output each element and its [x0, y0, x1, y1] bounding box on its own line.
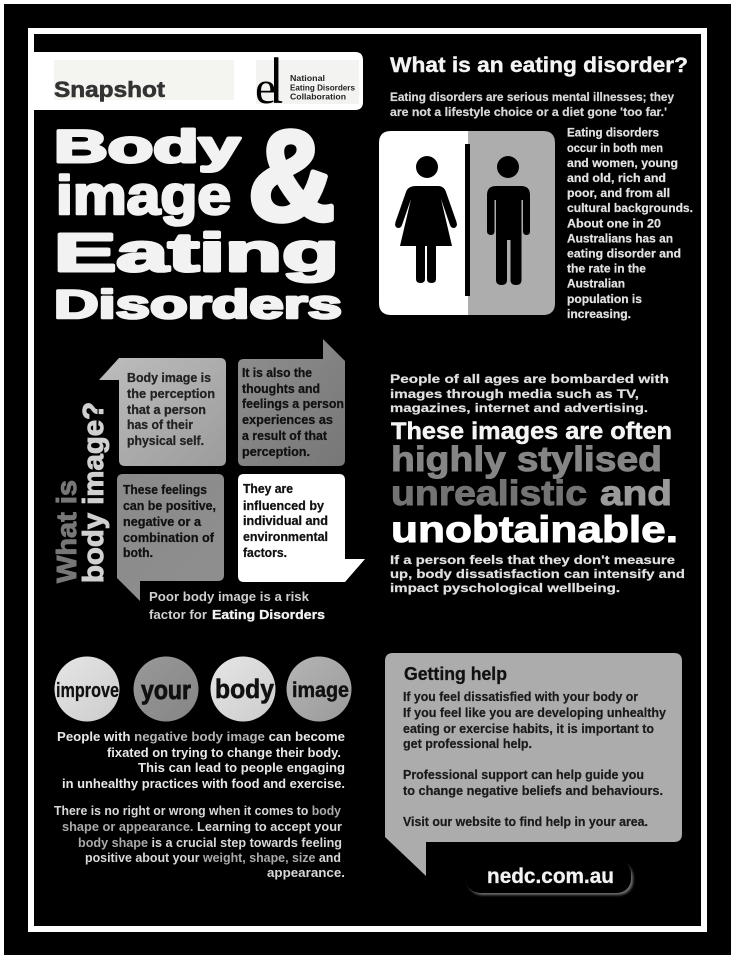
- text: who is affected: population is: [567, 294, 642, 306]
- title: Body: [54, 121, 240, 172]
- circles: improve your body image: image: [292, 679, 349, 702]
- logo: National Eating Disorders Collaboration: Collaboration: [290, 92, 346, 102]
- panel: body image perception: that a person: [127, 403, 206, 417]
- text: who is affected: eating disorder and: [567, 248, 681, 260]
- dissatisfaction text: If a person feels that they don't measure: [390, 553, 675, 567]
- website pill: nedc.com.au: nedc.com.au: [487, 865, 614, 888]
- panel: thoughts and feelings: [238, 339, 345, 466]
- circles: improve your body image: improve: [56, 680, 119, 702]
- panel: thoughts and feelings: It is also the: [242, 366, 312, 380]
- panel: positive or negative feelings: [117, 474, 224, 601]
- media text: [390, 372, 669, 415]
- header band: [34, 52, 363, 110]
- logo: National Eating Disorders Collaboration: [256, 57, 355, 104]
- website pill: nedc.com.au: [466, 860, 633, 895]
- intro text: [390, 92, 675, 119]
- text: who is affected: About one in 20: [567, 218, 661, 230]
- panel: influences: influenced by: [243, 499, 324, 513]
- logo: National Eating Disorders Collaboration: e: [255, 62, 276, 113]
- large statement: highly stylised: [391, 440, 662, 479]
- help text: If you feel like you are developing unhealthy: [403, 706, 666, 720]
- text: negative body image: in unhealthy practices with food and exercise.: [62, 777, 345, 791]
- media text: People of all ages are bombarded with: [390, 372, 669, 386]
- risk factor note: Poor body image is a risk: [149, 590, 309, 604]
- text: who is affected: cultural backgrounds.: [567, 203, 693, 215]
- text: accepting body shape: There is no right or wrong when it comes to body: [54, 804, 341, 818]
- text: who is affected: and old, rich and: [567, 173, 666, 185]
- help text: Visit our website to find help in your area.: [403, 815, 648, 829]
- heading: getting help: Getting help: [404, 664, 507, 684]
- panel: influences: environmental: [243, 530, 328, 544]
- help text: [403, 690, 666, 829]
- large statement: unrealistic: [391, 474, 587, 513]
- dissatisfaction text: up, body dissatisfaction can intensify and: [390, 567, 685, 581]
- text: who is affected: increasing.: [567, 309, 631, 321]
- dissatisfaction text: [390, 553, 685, 595]
- panel: positive or negative feelings: both.: [123, 546, 153, 560]
- panel: thoughts and feelings: feelings a person: [242, 397, 344, 411]
- panel: thoughts and feelings: perception.: [242, 445, 310, 459]
- text: accepting body shape: shape or appearance. Learning to accept your: [62, 820, 342, 834]
- text: who is affected: [567, 128, 693, 321]
- panel: positive or negative feelings: negative or a: [123, 515, 202, 529]
- circles: improve your body image: your: [141, 675, 191, 705]
- panel: influences: individual and: [243, 514, 328, 528]
- text: who is affected: the rate in the: [567, 264, 646, 276]
- media text: images through media such as TV,: [390, 387, 639, 401]
- media text: magazines, internet and advertising.: [390, 401, 648, 415]
- panel: thoughts and feelings: experiences as: [242, 413, 333, 427]
- large statement: and: [600, 474, 672, 513]
- text: negative body image: This can lead to people engaging: [138, 761, 345, 775]
- text: who is affected: Australian: [567, 279, 625, 291]
- circles: improve your body image: [54, 656, 352, 722]
- text: negative body image: [57, 730, 345, 791]
- panel: influences: They are: [243, 482, 293, 496]
- panel: influences: factors.: [243, 546, 287, 560]
- panel: positive or negative feelings: can be positive,: [123, 499, 216, 513]
- logo: National Eating Disorders Collaboration: Eating Disorders: [290, 82, 355, 92]
- panel: positive or negative feelings: These feelings: [123, 483, 207, 497]
- title: Disorders: [54, 283, 342, 327]
- panel: getting help: [385, 653, 682, 876]
- panel: thoughts and feelings: thoughts and: [242, 382, 320, 396]
- help text: If you feel dissatisfied with your body or: [403, 690, 638, 704]
- panel: thoughts and feelings: a result of that: [242, 429, 328, 443]
- text: who is affected: Australians has an: [567, 233, 673, 245]
- large statement: These images are often: [391, 418, 672, 445]
- title: Eating: [54, 223, 339, 283]
- panel: body image perception: has of their: [127, 418, 193, 432]
- dissatisfaction text: impact pyschological wellbeing.: [390, 581, 620, 595]
- panel: body image perception: Body image is: [127, 371, 211, 385]
- circles: improve your body image: body: [215, 674, 274, 704]
- vertical heading: what is body image: body image?: [78, 402, 110, 583]
- snapshot label: Snapshot: [54, 77, 166, 102]
- panel: body image perception: physical self.: [127, 434, 204, 448]
- help text: to change negative beliefs and behaviours.: [403, 784, 663, 798]
- help text: get professional help.: [403, 737, 532, 751]
- text: who is affected: poor, and from all: [567, 188, 670, 200]
- logo: National Eating Disorders Collaboration: d: [250, 45, 283, 118]
- large statement: unobtainable.: [391, 509, 678, 550]
- text: negative body image: People with negative body image can become: [57, 730, 345, 744]
- vertical heading: what is body image: What is: [51, 480, 82, 583]
- logo: National Eating Disorders Collaboration: National: [290, 73, 325, 83]
- risk factor note: factor for: [149, 608, 207, 622]
- large statement: [391, 418, 678, 550]
- panel: body image perception: the perception: [127, 387, 215, 401]
- heading: what is an eating disorder: What is an eating disorder?: [390, 53, 688, 77]
- icon: woman: [395, 156, 457, 283]
- text: accepting body shape: appearance.: [267, 866, 345, 880]
- panel: body image perception: [99, 358, 226, 466]
- icon: man: [487, 156, 530, 285]
- help text: eating or exercise habits, it is important to: [403, 722, 654, 736]
- text: accepting body shape: body shape is a crucial step towards feeling: [78, 836, 342, 850]
- title: &: [248, 105, 335, 248]
- risk factor note: [149, 590, 325, 622]
- risk factor note: Eating Disorders: [212, 608, 325, 622]
- help text: Professional support can help guide you: [403, 768, 644, 782]
- vertical heading: what is body image: [51, 402, 110, 583]
- text: negative body image: fixated on trying to change their body.: [107, 746, 341, 760]
- intro text: are not a lifestyle choice or a diet gone 'too far.': [390, 107, 667, 119]
- text: accepting body shape: [54, 804, 345, 880]
- intro text: Eating disorders are serious mental illnesses; they: [390, 92, 675, 104]
- title: image: [56, 164, 231, 226]
- panel: influences: [238, 474, 365, 582]
- panel: positive or negative feelings: combination of: [123, 531, 215, 545]
- text: who is affected: and women, young: [567, 158, 678, 170]
- text: who is affected: occur in both men: [567, 143, 663, 155]
- title: [54, 105, 342, 327]
- pictogram panel: woman and man: [379, 131, 555, 315]
- text: who is affected: Eating disorders: [567, 128, 659, 140]
- text: accepting body shape: positive about your weight, shape, size and: [85, 851, 341, 865]
